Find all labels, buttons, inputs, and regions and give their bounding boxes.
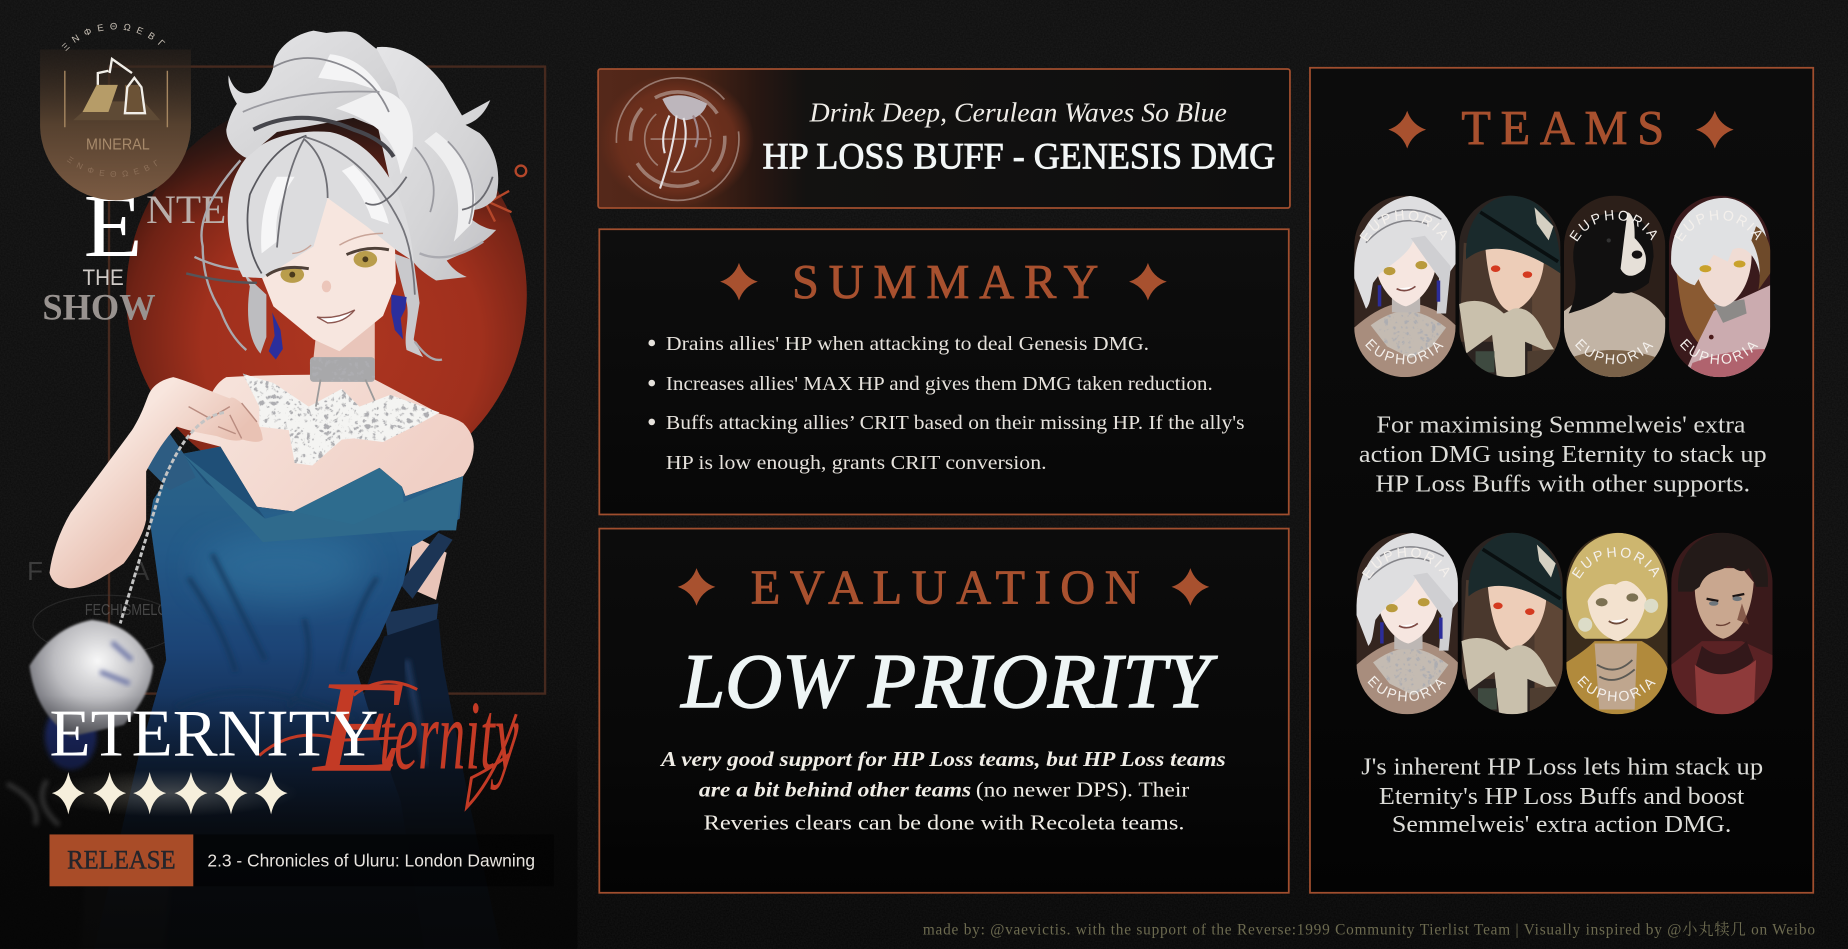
evaluation heading: EVALUATION [751,561,1140,614]
team two description: Semmelweis' extra action DMG. [1392,811,1731,838]
portrait: eternity: EUPHORIA [1360,210,1447,242]
event watermark text: enter the show: THE [82,265,124,290]
badge: mineral afflatus [40,22,191,200]
hair: shading and highlights [243,54,493,295]
sleeve strap [146,434,196,490]
diamond necklace and choker [243,357,440,466]
face [262,189,396,351]
faded watermark lower left: A [132,558,150,586]
silver chain [120,413,224,623]
team two description: Eternity's HP Loss Buffs and boost [1379,783,1744,810]
summary bullets: Increases allies' MAX HP and gives them DMG taken reduction. [666,373,1213,395]
portrait: blonde [1566,532,1668,714]
portrait: J [1671,533,1773,714]
event watermark text: enter the show [42,177,226,327]
chest and shoulders [189,375,474,512]
team one description: action DMG using Eternity to stack up [1359,441,1767,468]
lower hair locks [186,160,442,360]
event watermark text: enter the show: SHOW [42,286,156,327]
psychube effect: HP LOSS BUFF - GENESIS DMG [763,136,1275,177]
portrait: silver hair: EUPHORIA [1674,210,1762,242]
panel: psychube [598,69,1290,208]
red spark decoration [469,166,526,222]
panel: character art [0,31,578,949]
portrait: eternity: EUPHORIA [1365,338,1444,364]
script name: Eternity: ternity [380,681,519,790]
dress folds [177,554,377,719]
building icon [73,59,160,120]
faded watermark lower left: FECHISMELO [85,602,167,619]
psychube name: Drink Deep, Cerulean Waves So Blue [809,97,1227,127]
script name: Eternity: E [311,653,405,800]
teams heading: TEAMS [1461,102,1664,155]
panel: evaluation [599,529,1289,893]
side bars [65,71,167,127]
eyes, nose and mouth [266,233,389,323]
portrait: eternity: EUPHORIA [1368,676,1446,702]
frame rectangle behind character [109,67,545,694]
evaluation verdict: LOW PRIORITY [680,638,1218,724]
summary bullets: Buffs attacking allies’ CRIT based on their missing HP. If the ally's [666,412,1245,434]
portrait: hat girl [1459,195,1560,377]
back hair bun [365,47,498,281]
script name: Eternity [259,653,519,807]
psychube icon: jellyfish [599,73,754,207]
panel: summary [599,229,1289,514]
six star rarity [44,770,298,817]
faded watermark lower left: F [27,558,43,586]
lace skirt trace [80,878,171,949]
event watermark text: enter the show: NTE [146,187,226,232]
mineral label: MINERAL [86,137,150,154]
circular greek lettering: ΞΝΦΕΘΩΕΒΓ [62,22,166,51]
faint lower arc lettering: ΞΝΦΕΘΩΕΒΓ [67,156,157,177]
viewer-left arm and hand [50,377,263,588]
release bar: 2.3 - Chronicles of Uluru: London Dawning [207,851,535,870]
summary bullets [648,333,1245,474]
portrait: eternity [1354,196,1456,378]
panel: teams [1309,66,1814,894]
right bust drape [293,468,405,528]
portrait: silver hair [1669,196,1770,378]
hair: top bun [226,31,412,158]
event watermark text: enter the show: E [84,177,143,276]
viewer-right arm and straps [359,533,501,949]
evaluation text [659,747,1226,835]
team one portraits [1354,196,1770,378]
portrait: eternity [1356,532,1458,714]
evaluation text: are a bit behind other teams [699,778,971,802]
portrait: dog [1564,196,1666,378]
portrait: blonde: EUPHORIA [1572,547,1660,579]
portrait: dog: EUPHORIA [1569,210,1657,242]
portrait: hat girl [1461,533,1563,714]
left bust drape [183,447,273,530]
summary bullets: Drains allies' HP when attacking to deal Genesis DMG. [666,333,1149,355]
red circle backdrop [126,118,527,495]
summary bullets: HP is low enough, grants CRIT conversion. [666,452,1047,474]
team two description [1361,753,1763,838]
portrait: silver hair: EUPHORIA [1680,338,1758,364]
portrait: blonde: EUPHORIA [1577,676,1656,702]
faded watermark lower left [27,558,179,654]
team one description: HP Loss Buffs with other supports. [1375,470,1750,497]
evaluation text: A very good support for HP Loss teams, but HP Loss teams [659,747,1226,771]
neck [311,318,375,380]
summary heading [720,256,1167,309]
team two portraits [1356,532,1772,714]
faint ornament lower left [7,780,59,825]
team one description: For maximising Semmelweis' extra [1377,412,1745,439]
character name: ETERNITY [50,695,378,770]
evaluation text: Reveries clears can be done with Recoleta teams. [704,811,1184,835]
release bar: RELEASE [67,846,176,875]
blue dress [94,447,463,949]
team one description [1359,412,1767,497]
silver purse [29,620,153,770]
dress highlight [198,533,368,603]
blue earrings [269,295,407,359]
release bar [50,834,554,886]
bottom fade [0,695,578,949]
hair: fringe and crown [228,132,414,278]
evaluation text: (no newer DPS). Their [976,778,1189,802]
team two description: J's inherent HP Loss lets him stack up [1361,753,1763,780]
teams heading [1388,102,1734,155]
off-shoulder band [183,454,463,542]
portrait: dog: EUPHORIA [1575,338,1654,364]
footer credit: made by: @vaevictis. with the support of the Reverse:1999 Community Tierlist Team | Visually inspired by @小丸犊几 on Weibo [923,921,1815,939]
portrait: eternity: EUPHORIA [1362,547,1450,579]
summary heading: SUMMARY [792,256,1098,309]
